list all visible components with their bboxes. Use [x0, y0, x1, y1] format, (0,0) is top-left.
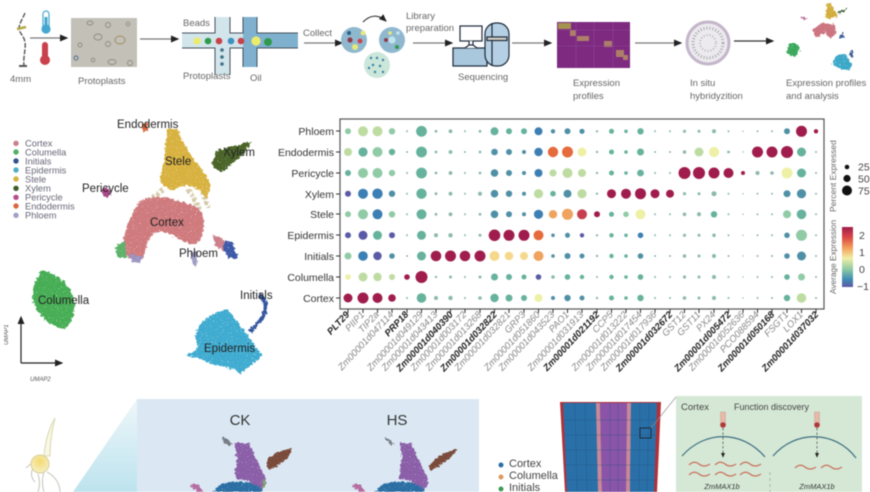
gene labels: Zm00001d013222	[569, 309, 631, 374]
gene labels: Zm00001d017936	[598, 309, 660, 374]
cluster: columella root patch	[115, 240, 127, 258]
cluster: phloem arm	[190, 252, 198, 268]
cluster: stele	[160, 128, 210, 198]
gene labels: Zm00001d032672	[613, 309, 676, 375]
frame	[340, 119, 824, 309]
dots	[344, 126, 818, 304]
text: Cortex: Cortex	[681, 402, 709, 413]
icon: thermometer left	[720, 412, 726, 428]
gene labels: Zm00001d047114	[335, 310, 396, 374]
cluster: pericycle	[101, 187, 111, 198]
column ticks	[348, 309, 816, 313]
row labels: Endodermis	[278, 147, 334, 159]
gene labels: Zm00001d051860	[481, 309, 543, 374]
row labels: Phloem	[298, 126, 334, 138]
text: Expression profiles: profiles	[573, 91, 604, 102]
gene labels: TIP2a	[356, 310, 382, 336]
label: Columella: Columella	[38, 295, 90, 307]
row labels: Epidermis	[287, 230, 334, 242]
legend: cell types: Columella	[25, 148, 67, 158]
cluster: columella	[33, 270, 74, 328]
row labels: Stele	[310, 209, 334, 221]
gene labels: Zm00001d040390	[394, 309, 456, 375]
gene labels: Zm00001d005472	[672, 309, 734, 375]
row labels: Initials	[304, 251, 334, 263]
diagram: right transcripts	[795, 465, 842, 469]
legend: average expression: Average Expression	[828, 220, 838, 294]
text: In situ hybridyzition: hybridyzition	[690, 91, 743, 102]
arrow: to microfluidics	[140, 38, 178, 40]
legend: cell types: Endodermis	[25, 202, 75, 212]
legend: average expression	[828, 220, 869, 294]
gene labels: PCO088594	[718, 310, 762, 355]
legend: bottom clusters	[498, 458, 559, 492]
gene labels: PIIP1	[343, 310, 367, 334]
image: root section model	[560, 397, 676, 492]
gene labels: Zm00001d003172	[408, 309, 470, 374]
cluster: phloem	[128, 254, 143, 263]
gene labels: Zm00001d031913	[525, 309, 587, 374]
text: 4mm: 4mm	[10, 74, 31, 85]
gene labels: PX24	[694, 310, 718, 334]
text: Expression profiles: Expression	[573, 78, 620, 89]
arrow: to expression profiles	[512, 42, 551, 44]
legend: cell types: Cortex	[25, 138, 53, 148]
gene labels: Zm00001d052636	[686, 309, 748, 374]
legend: percent expressed: 25	[858, 162, 870, 174]
text: Expression profiles and analysis: and analysis	[786, 91, 839, 102]
cluster: cortex	[123, 197, 204, 261]
clusters: all scatter blobs	[33, 124, 266, 374]
chart: CK UMAP	[190, 437, 292, 492]
chart: mini UMAP	[786, 3, 853, 70]
row labels: Cortex	[303, 293, 335, 305]
gene labels: Zm00001d021192	[541, 309, 603, 374]
chart: expression heatmap	[557, 22, 630, 68]
text: ZmMAX1b left: ZmMAX1b	[703, 482, 740, 491]
gene labels: PRP18	[383, 309, 412, 339]
gene labels: PAO1	[547, 310, 572, 335]
gene labels: Zm00001d050168	[715, 309, 778, 375]
legend: percent expressed: 50	[858, 174, 870, 186]
gene labels: PLT29	[325, 309, 353, 337]
row labels: Pericycle	[291, 168, 334, 180]
image: in situ root section	[687, 22, 729, 64]
text: ZmMAX1b right: ZmMAX1b	[798, 482, 835, 491]
text: Library preparation: preparation	[406, 23, 454, 34]
gene labels	[325, 309, 822, 375]
gene labels: Zm00001d037032	[759, 309, 822, 375]
legend: percent expressed: Percent Expressed	[828, 140, 838, 212]
legend: bottom clusters: Cortex	[509, 458, 542, 470]
legend: average expression: 1	[859, 247, 865, 259]
text: Protoplasts chip label: Protoplasts	[183, 71, 231, 82]
legend: cell types: Phloem	[25, 210, 57, 220]
gene labels: Zm00001d049129	[364, 309, 426, 374]
legend: cell types: Xylem	[25, 184, 51, 194]
cluster: stele to cortex bridge	[150, 190, 208, 212]
icon: sequencer	[453, 23, 509, 66]
label: Epidermis: Epidermis	[204, 343, 255, 355]
cluster: initials	[250, 296, 266, 332]
row ticks	[336, 131, 340, 298]
legend: percent expressed: 75	[858, 186, 870, 198]
panel: CK versus HS UMAPs	[137, 399, 479, 492]
gene labels: GST12	[660, 309, 689, 339]
icon: germinating seedling	[26, 418, 60, 492]
gene labels: LOX1	[781, 310, 806, 335]
diagram: microfluidic chip	[182, 17, 298, 75]
arrow: to in situ	[635, 42, 681, 44]
legend: average expression: 2	[859, 230, 865, 242]
icon: collected droplets	[341, 27, 405, 78]
gene labels: GRP3	[503, 309, 529, 336]
arrow: to analysis	[734, 40, 773, 42]
gene labels: Zm00001d043413	[379, 309, 441, 374]
text: Collect: Collect	[303, 28, 332, 39]
gene labels: FSGT1	[762, 310, 791, 339]
axes: UMAP arrows: UMAP2	[30, 377, 51, 383]
chart: HS UMAP	[352, 437, 457, 492]
text: Expression profiles and analysis: Expression profiles	[786, 78, 867, 89]
row labels: Columella	[287, 272, 334, 284]
icon: maize seedling	[17, 13, 27, 66]
legend: cell types: Pericycle	[25, 192, 63, 202]
arrow: curved droplet arrow	[363, 16, 386, 22]
legend: average expression: −1	[857, 281, 869, 293]
text: Oil: Oil	[250, 73, 262, 84]
label: Endodermis: Endodermis	[117, 119, 179, 131]
icon: cold thermometer	[41, 11, 51, 34]
legend: cell types: Stele	[25, 174, 46, 184]
row labels	[278, 126, 335, 305]
gene labels: Zm00001d043523	[496, 309, 558, 374]
legend: percent expressed	[828, 140, 870, 212]
text: Sequencing: Sequencing	[458, 72, 508, 83]
label: Cortex: Cortex	[150, 217, 184, 229]
image: protoplasts micrograph	[71, 18, 137, 67]
arrow: to sequencing	[413, 42, 452, 44]
cluster: initials pink patch	[212, 235, 228, 252]
text: Library preparation: Library	[406, 11, 435, 22]
diagram: left transcripts	[689, 462, 761, 476]
gene labels: Zm00001d017454	[583, 310, 645, 374]
cluster: xylem	[212, 141, 252, 172]
legend: cell types: Epidermis	[25, 166, 67, 176]
panel: function discovery	[676, 396, 862, 492]
axes: UMAP arrows: UMAP1	[4, 324, 10, 345]
text: Function discovery: Function discovery	[734, 402, 810, 412]
text: Protoplasts: Protoplasts	[78, 76, 126, 87]
legend: bottom clusters: Columella	[509, 470, 559, 482]
diagram: membrane arcs	[682, 437, 856, 458]
heading: CK: CK	[230, 412, 250, 429]
text: In situ hybridyzition: In situ	[690, 78, 715, 89]
text: Beads: Beads	[183, 18, 210, 29]
label: Phloem: Phloem	[179, 248, 218, 260]
legend: cell types: Initials	[25, 156, 52, 166]
gene labels: Zm00001d013268	[423, 309, 485, 374]
cluster: initials blue patch	[224, 240, 238, 258]
label: Stele: Stele	[165, 156, 191, 168]
legend: cell types	[13, 138, 75, 220]
panel: workflow pipeline	[10, 3, 867, 102]
legend: average expression: 0	[859, 264, 865, 276]
arrow: signal paths	[723, 428, 817, 457]
heading: HS: HS	[387, 412, 407, 429]
cluster: endodermis	[141, 124, 148, 131]
arrow: to protoplasts	[30, 37, 67, 39]
shape: zoom wedge	[73, 399, 137, 492]
gene labels: Zm00001d032822	[438, 309, 500, 375]
chart: UMAP of cell clusters	[33, 119, 273, 374]
label: Initials: Initials	[240, 290, 273, 302]
icon: thermometer right	[814, 412, 820, 428]
gene labels: Zm00001d032821	[452, 310, 513, 374]
gene labels: CCP5	[590, 309, 616, 336]
axes: UMAP arrows	[4, 317, 62, 383]
cluster: epidermis	[185, 308, 262, 374]
label: Pericycle: Pericycle	[82, 183, 129, 195]
row labels: Xylem	[305, 189, 334, 201]
gene labels: GST11	[675, 310, 703, 339]
chart: dot plot	[278, 119, 824, 375]
icon: heat thermometer	[40, 42, 50, 65]
label: Xylem: Xylem	[223, 147, 255, 159]
arrow: collect	[304, 42, 342, 44]
